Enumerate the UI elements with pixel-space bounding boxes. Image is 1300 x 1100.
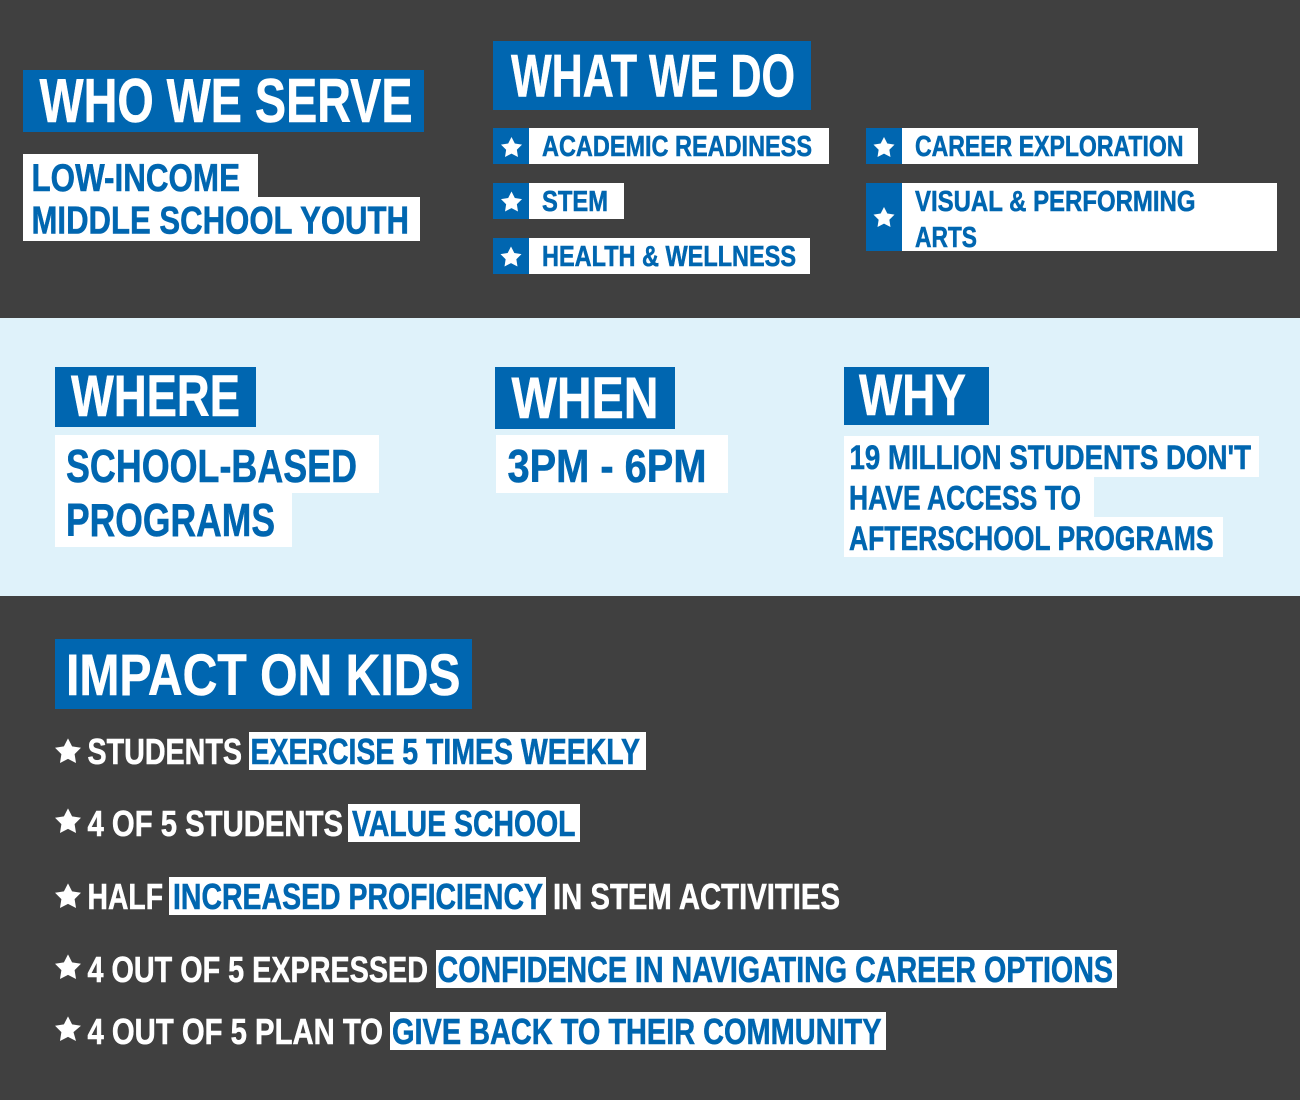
item: visual and performing arts: VISUAL & PERFORMING: [915, 186, 1196, 218]
impact row: exercise: [55, 731, 646, 772]
impact row: exercise: EXERCISE 5 TIMES WEEKLY: [250, 731, 640, 772]
panel: what we do: [493, 41, 1277, 274]
item: academic readiness: ACADEMIC READINESS: [542, 131, 812, 163]
impact row: give back: GIVE BACK TO THEIR COMMUNITY: [392, 1011, 882, 1052]
impact row: value school: VALUE SCHOOL: [352, 803, 576, 844]
text block: low-income middle school youth: [23, 154, 420, 242]
item: health and wellness: [493, 238, 810, 274]
impact row: increased proficiency: [55, 876, 840, 917]
heading: what we do: WHAT WE DO: [511, 42, 795, 110]
text block: 3pm to 6pm: 3PM - 6PM: [508, 440, 706, 492]
text block: school-based programs: [55, 435, 379, 547]
panel: when: [495, 366, 728, 493]
impact row: increased proficiency: HALF: [88, 876, 163, 917]
panel: why: [844, 363, 1259, 558]
text block: school-based programs: SCHOOL-BASED: [66, 440, 357, 492]
impact row: career confidence: [55, 949, 1117, 990]
heading: who we serve: WHO WE SERVE: [40, 67, 412, 136]
panel: who we serve: [23, 67, 424, 242]
text block: 19 million students: HAVE ACCESS TO: [849, 480, 1081, 518]
item: health and wellness: HEALTH & WELLNESS: [542, 241, 796, 273]
heading: why: WHY: [859, 363, 966, 428]
impact row: value school: 4 OF 5 STUDENTS: [88, 803, 343, 844]
text block: school-based programs: PROGRAMS: [66, 494, 275, 546]
heading: impact on kids: IMPACT ON KIDS: [66, 643, 460, 708]
item: career exploration: CAREER EXPLORATION: [915, 131, 1184, 163]
impact row: value school: [55, 803, 580, 844]
impact row: give back: [55, 1011, 886, 1052]
item: stem: [493, 183, 624, 219]
text block: low-income middle school youth: MIDDLE SCHOOL YOUTH: [32, 200, 409, 242]
impact row: career confidence: 4 OUT OF 5 EXPRESSED: [88, 949, 428, 990]
heading: where: WHERE: [71, 364, 240, 429]
impact row: give back: 4 OUT OF 5 PLAN TO: [88, 1011, 383, 1052]
item: academic readiness: [493, 128, 829, 164]
impact row: increased proficiency: INCREASED PROFICIENCY: [173, 876, 543, 917]
text block: low-income middle school youth: LOW-INCOME: [32, 157, 240, 200]
panel: impact on kids: [55, 639, 1117, 1052]
panel: where: [55, 364, 379, 547]
item: visual and performing arts: [866, 183, 1277, 254]
impact row: exercise: STUDENTS: [88, 731, 242, 772]
impact row: increased proficiency: IN STEM ACTIVITIES: [553, 876, 840, 917]
impact row: career confidence: CONFIDENCE IN NAVIGATING CAREER OPTIONS: [438, 949, 1113, 990]
item: career exploration: [866, 128, 1198, 164]
text block: 19 million students: [844, 436, 1259, 558]
item: visual and performing arts: ARTS: [915, 222, 977, 254]
item: stem: STEM: [542, 186, 608, 218]
heading: when: WHEN: [512, 366, 658, 431]
